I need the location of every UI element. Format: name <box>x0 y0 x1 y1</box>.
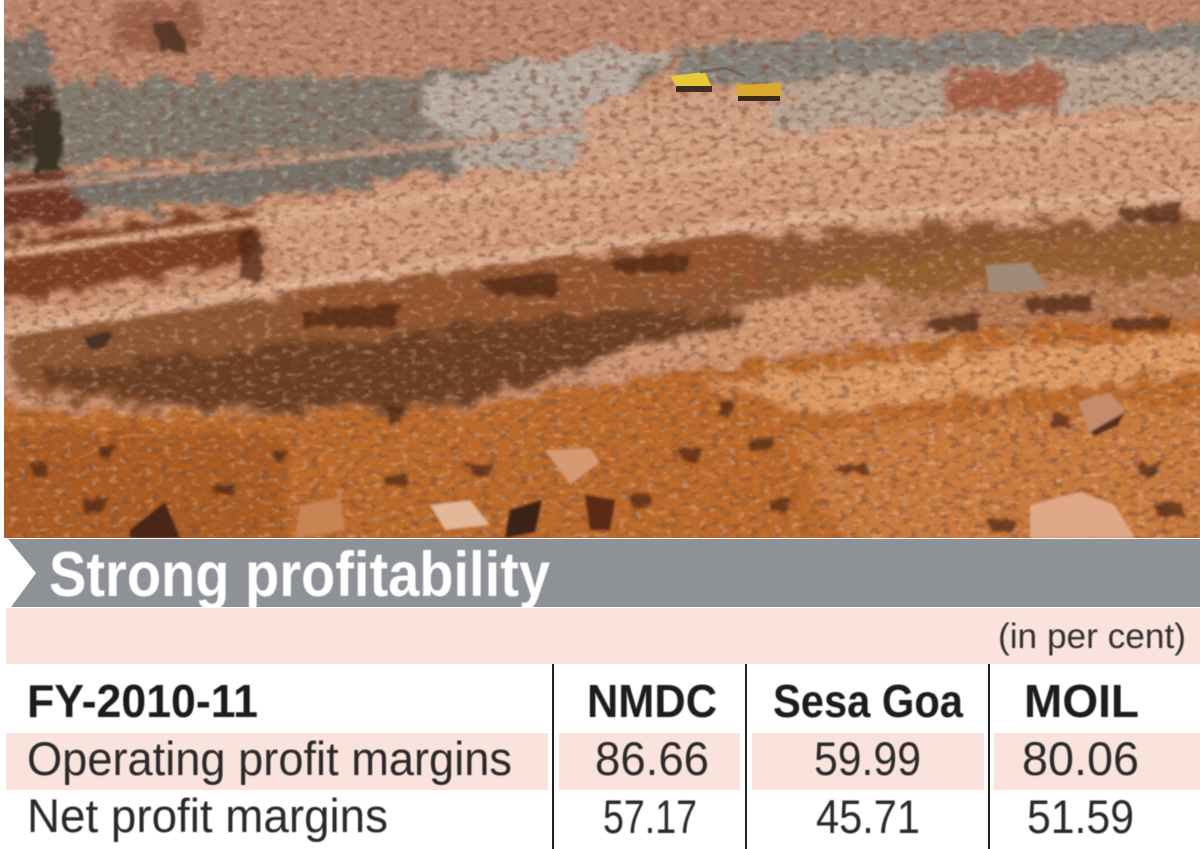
rock texture <box>4 0 1200 538</box>
soft colour regions of the terraces <box>0 0 1200 590</box>
header row: Sesa Goa <box>773 675 963 727</box>
row: net profit margins: 45.71 <box>816 790 920 843</box>
scattered rocks in foreground <box>30 22 1184 532</box>
header row: MOIL <box>1024 675 1139 727</box>
header row <box>27 675 1139 727</box>
icon: yellow excavator and dump truck <box>670 68 782 101</box>
row: operating profit margins: Operating profit margins <box>27 732 512 785</box>
row: net profit margins: 57.17 <box>603 790 697 843</box>
row: operating profit margins: 59.99 <box>814 732 921 785</box>
row: operating profit margins: 86.66 <box>595 732 709 785</box>
boulders <box>32 22 190 348</box>
row: net profit margins <box>27 789 1134 843</box>
unit strip <box>6 608 1200 664</box>
title text: Strong profitability <box>49 540 550 610</box>
data table <box>6 664 1200 849</box>
photo: open-pit iron ore mine <box>0 0 1200 590</box>
row: operating profit margins <box>27 732 1139 785</box>
row: net profit margins: 51.59 <box>1027 790 1134 843</box>
row: net profit margins: Net profit margins <box>27 789 388 842</box>
header row: NMDC <box>587 675 717 727</box>
title banner <box>8 539 1200 610</box>
column dividers <box>552 664 990 849</box>
highlighted row background <box>6 733 1200 790</box>
row: operating profit margins: 80.06 <box>1022 732 1139 785</box>
road ledges <box>0 98 1200 332</box>
unit note: (in per cent) <box>998 617 1186 656</box>
header row: FY-2010-11 <box>27 675 258 727</box>
